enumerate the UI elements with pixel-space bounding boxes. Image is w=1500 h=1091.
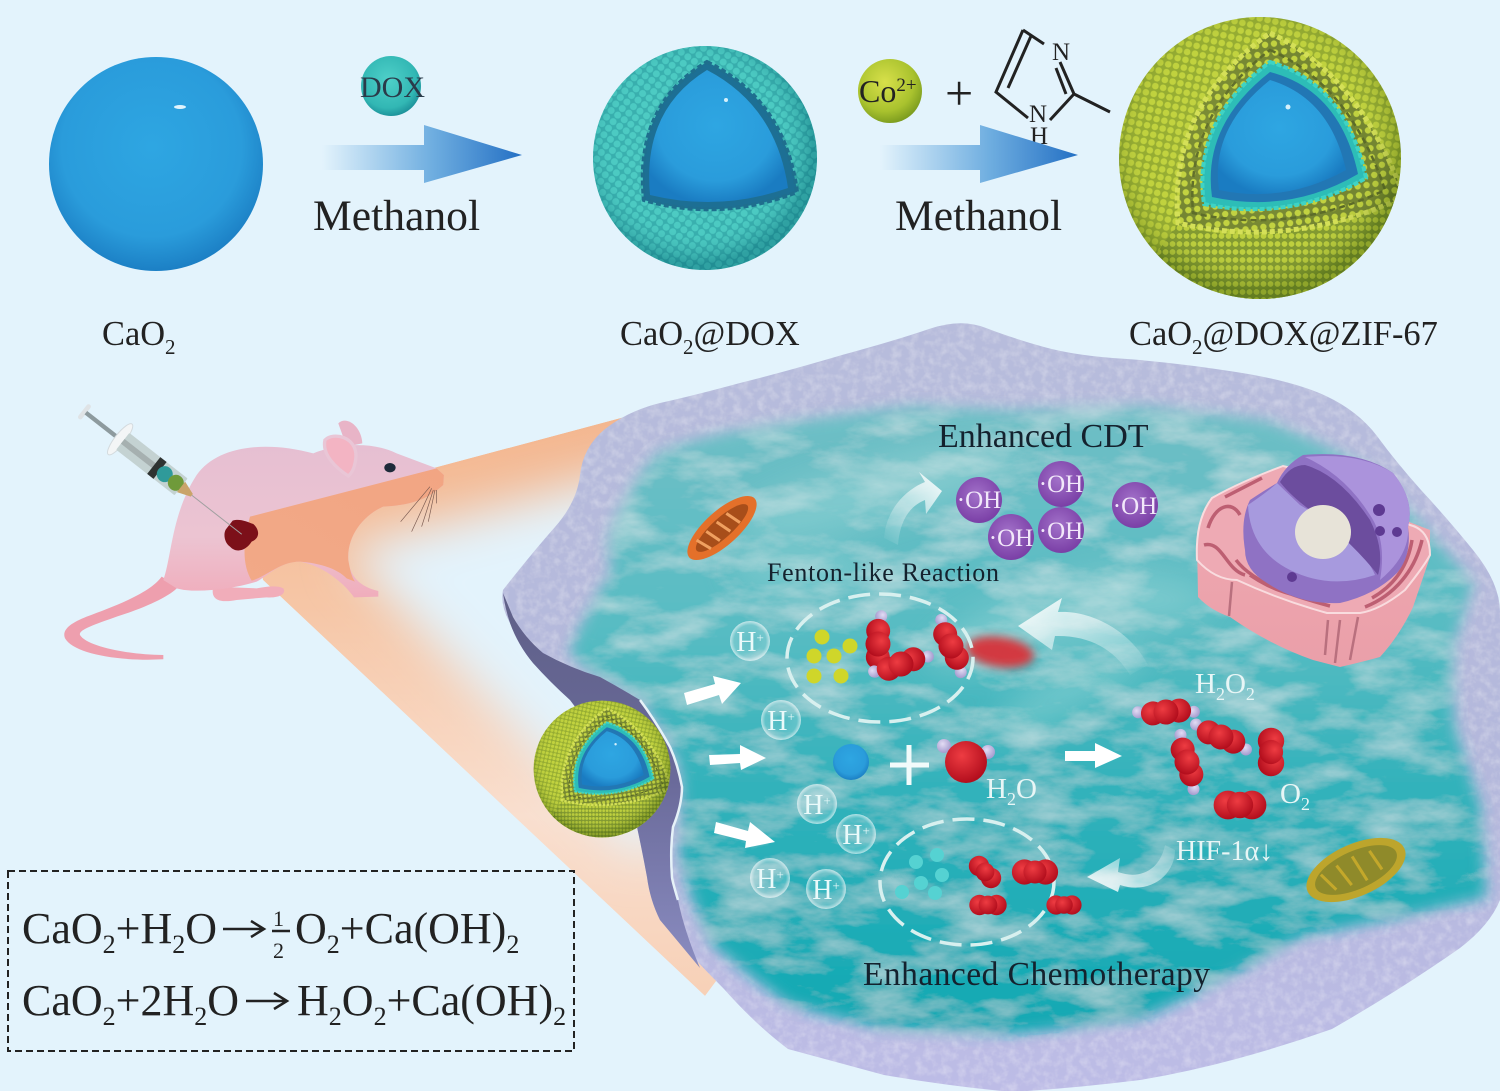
equation two: 2 bbox=[553, 1002, 566, 1031]
cobalt ions bbox=[806, 630, 858, 684]
equation two: 2 bbox=[194, 1002, 207, 1031]
mouse ear back bbox=[338, 421, 362, 447]
nuclear pores bbox=[1287, 504, 1402, 582]
proton bubbles: H bbox=[812, 875, 832, 906]
sphere: DOX reagent bbox=[360, 56, 425, 116]
light edge of rim bbox=[640, 700, 682, 900]
mouse body bbox=[163, 445, 444, 597]
label: O2: 2 bbox=[1301, 794, 1310, 814]
label: H2O2: 2 bbox=[1216, 684, 1225, 704]
label: CaO2@DOX: 2 bbox=[683, 335, 694, 359]
equation one: 1 bbox=[273, 906, 284, 931]
label: CaO2@DOX@ZIF-67: @DOX@ZIF-67 bbox=[1203, 315, 1438, 353]
mitochondrion olive bbox=[1297, 825, 1415, 915]
icon: 2-methylimidazole structure: H bbox=[1030, 123, 1048, 150]
ER top folds bbox=[1197, 466, 1430, 613]
label: CaO2: CaO bbox=[102, 315, 165, 353]
equation two: 2 bbox=[329, 1002, 342, 1031]
label: H2O2: O bbox=[1225, 668, 1246, 700]
endoplasmic reticulum and nucleus bbox=[1197, 454, 1430, 667]
curved arrow to radicals bbox=[884, 472, 942, 545]
sphere: DOX reagent: DOX bbox=[360, 71, 425, 104]
proton bubbles: H bbox=[767, 706, 787, 737]
nucleus outer lid bbox=[1305, 456, 1410, 580]
proton bubbles: + bbox=[862, 823, 870, 838]
equation two: +Ca(OH) bbox=[387, 976, 553, 1025]
equation two: H bbox=[297, 976, 329, 1025]
proton bubbles: H bbox=[842, 820, 862, 851]
curved arrow from HIF bbox=[1087, 845, 1175, 892]
mouse tail bbox=[64, 577, 178, 660]
equation one: 2 bbox=[172, 930, 185, 959]
equation one: 2 bbox=[103, 930, 116, 959]
proton bubbles: H bbox=[803, 790, 823, 821]
label: CaO2@DOX: CaO bbox=[620, 315, 683, 353]
proton bubbles: H bbox=[736, 627, 756, 658]
label: H2O2: H bbox=[1195, 668, 1216, 700]
proton bubbles bbox=[730, 621, 876, 909]
arrow: step two bbox=[880, 125, 1078, 183]
CaO2 ball bbox=[833, 744, 869, 780]
cell rim bbox=[502, 323, 1500, 1091]
equation one: +Ca(OH) bbox=[340, 904, 506, 953]
proton bubbles: H bbox=[756, 864, 776, 895]
proton bubbles: + bbox=[756, 630, 764, 645]
hydroxyl radicals: ·OH bbox=[989, 525, 1033, 552]
arrow: step one bbox=[322, 125, 522, 183]
hydroxyl radicals: ·OH bbox=[1039, 518, 1083, 545]
white arrows bbox=[684, 676, 1122, 848]
label: H2O: H bbox=[986, 773, 1007, 805]
red smear bbox=[964, 632, 1036, 672]
icon: 2-methylimidazole structure bbox=[996, 30, 1110, 150]
equations box bbox=[8, 871, 574, 1051]
proton bubbles: + bbox=[823, 793, 831, 808]
dashed circle: bottom bbox=[880, 819, 1054, 945]
hydroxyl radicals bbox=[956, 461, 1158, 560]
equation two arrow bbox=[246, 993, 287, 1009]
label: Fenton-like Reaction: Fenton-like Reaction bbox=[767, 558, 999, 587]
ER inner folds bbox=[1204, 478, 1422, 607]
equation two: O bbox=[342, 976, 374, 1025]
equation one arrow and fraction bar bbox=[223, 921, 290, 937]
water bbox=[570, 406, 1486, 1034]
proton bubbles: + bbox=[776, 867, 784, 882]
label: CaO2: 2 bbox=[165, 335, 176, 359]
mouse ear front bbox=[325, 436, 356, 476]
cell bbox=[502, 323, 1500, 1091]
ER wall seams bbox=[1229, 582, 1358, 663]
equation two: O bbox=[207, 976, 239, 1025]
tumour bbox=[224, 520, 258, 550]
label: Enhanced Chemotherapy: Enhanced Chemotherapy bbox=[863, 956, 1210, 993]
red oxygen clusters in chemotherapy circle bbox=[965, 852, 1082, 915]
zoom beam from tumour to cell bbox=[262, 418, 716, 996]
hydroxyl radicals: ·OH bbox=[957, 487, 1001, 514]
label: CaO2@DOX@ZIF-67: 2 bbox=[1192, 335, 1203, 359]
mouse back foot bbox=[213, 586, 284, 601]
sphere: Co2+ reagent bbox=[858, 59, 922, 123]
sphere: Co2+ reagent: 2+ bbox=[896, 75, 917, 96]
proton bubbles: + bbox=[787, 709, 795, 724]
syringe bbox=[71, 395, 254, 550]
equation two: CaO bbox=[22, 976, 103, 1025]
equation one: 2 bbox=[327, 930, 340, 959]
hydroxyl radicals: ·OH bbox=[1039, 471, 1083, 498]
label: Methanol one: Methanol bbox=[313, 192, 480, 240]
equation two: 2 bbox=[103, 1002, 116, 1031]
nucleolus bbox=[1295, 505, 1351, 559]
label: H2O: O bbox=[1016, 773, 1037, 805]
label: Enhanced CDT: Enhanced CDT bbox=[938, 418, 1149, 455]
sphere: CaO2@DOX@ZIF-67 bbox=[1110, 17, 1410, 320]
equation one: O bbox=[185, 904, 217, 953]
water highlights bbox=[727, 422, 1210, 754]
proton bubbles: + bbox=[832, 878, 840, 893]
icon: 2-methylimidazole structure: N bbox=[1052, 39, 1070, 66]
label: O2: O bbox=[1280, 778, 1301, 810]
equation two: +2H bbox=[116, 976, 194, 1025]
equation one: CaO bbox=[22, 904, 103, 953]
plus sign: + bbox=[945, 65, 973, 121]
sphere: Co2+ reagent: Co bbox=[859, 73, 896, 109]
equation one: +H bbox=[116, 904, 172, 953]
mouse whiskers bbox=[401, 487, 437, 532]
hydroxyl radicals: ·OH bbox=[1113, 493, 1157, 520]
nucleus shell bbox=[1243, 454, 1410, 603]
equation one: O bbox=[295, 904, 327, 953]
mouse front in beam colour bbox=[245, 468, 444, 582]
icon: 2-methylimidazole structure: N bbox=[1029, 101, 1047, 128]
equation two: 2 bbox=[374, 1002, 387, 1031]
label: CaO2@DOX@ZIF-67: CaO bbox=[1129, 315, 1192, 353]
label: H2O: 2 bbox=[1007, 789, 1016, 809]
dark outer side of rim bbox=[503, 593, 700, 968]
dashed circle: top bbox=[787, 594, 973, 722]
sphere: CaO2@DOX bbox=[593, 46, 817, 270]
mouse eye bbox=[384, 463, 396, 472]
sphere: CaO2 bbox=[49, 57, 263, 271]
label: Methanol two: Methanol bbox=[895, 192, 1062, 240]
big curved arrow bbox=[1018, 598, 1148, 675]
mitochondrion orange bbox=[678, 486, 766, 570]
hydrogen peroxide and oxygen molecules bbox=[1131, 690, 1284, 819]
mouse with syringe bbox=[64, 395, 444, 660]
equation one: 2 bbox=[506, 930, 519, 959]
small nanoparticle at cell edge bbox=[529, 701, 675, 848]
nucleus floor bbox=[1248, 483, 1375, 581]
DOX molecules bbox=[895, 848, 949, 900]
ER wall bbox=[1197, 480, 1430, 667]
label: HIF-1 alpha down: HIF-1α↓ bbox=[1176, 836, 1273, 867]
nucleus inner wall bbox=[1280, 465, 1380, 575]
plus bbox=[890, 745, 929, 785]
water molecule bbox=[937, 739, 995, 783]
peroxide molecules in Fenton circle bbox=[860, 609, 981, 693]
label: CaO2@DOX: @DOX bbox=[694, 315, 800, 353]
label: H2O2: 2 bbox=[1246, 684, 1255, 704]
equation one: 2 bbox=[273, 938, 284, 963]
